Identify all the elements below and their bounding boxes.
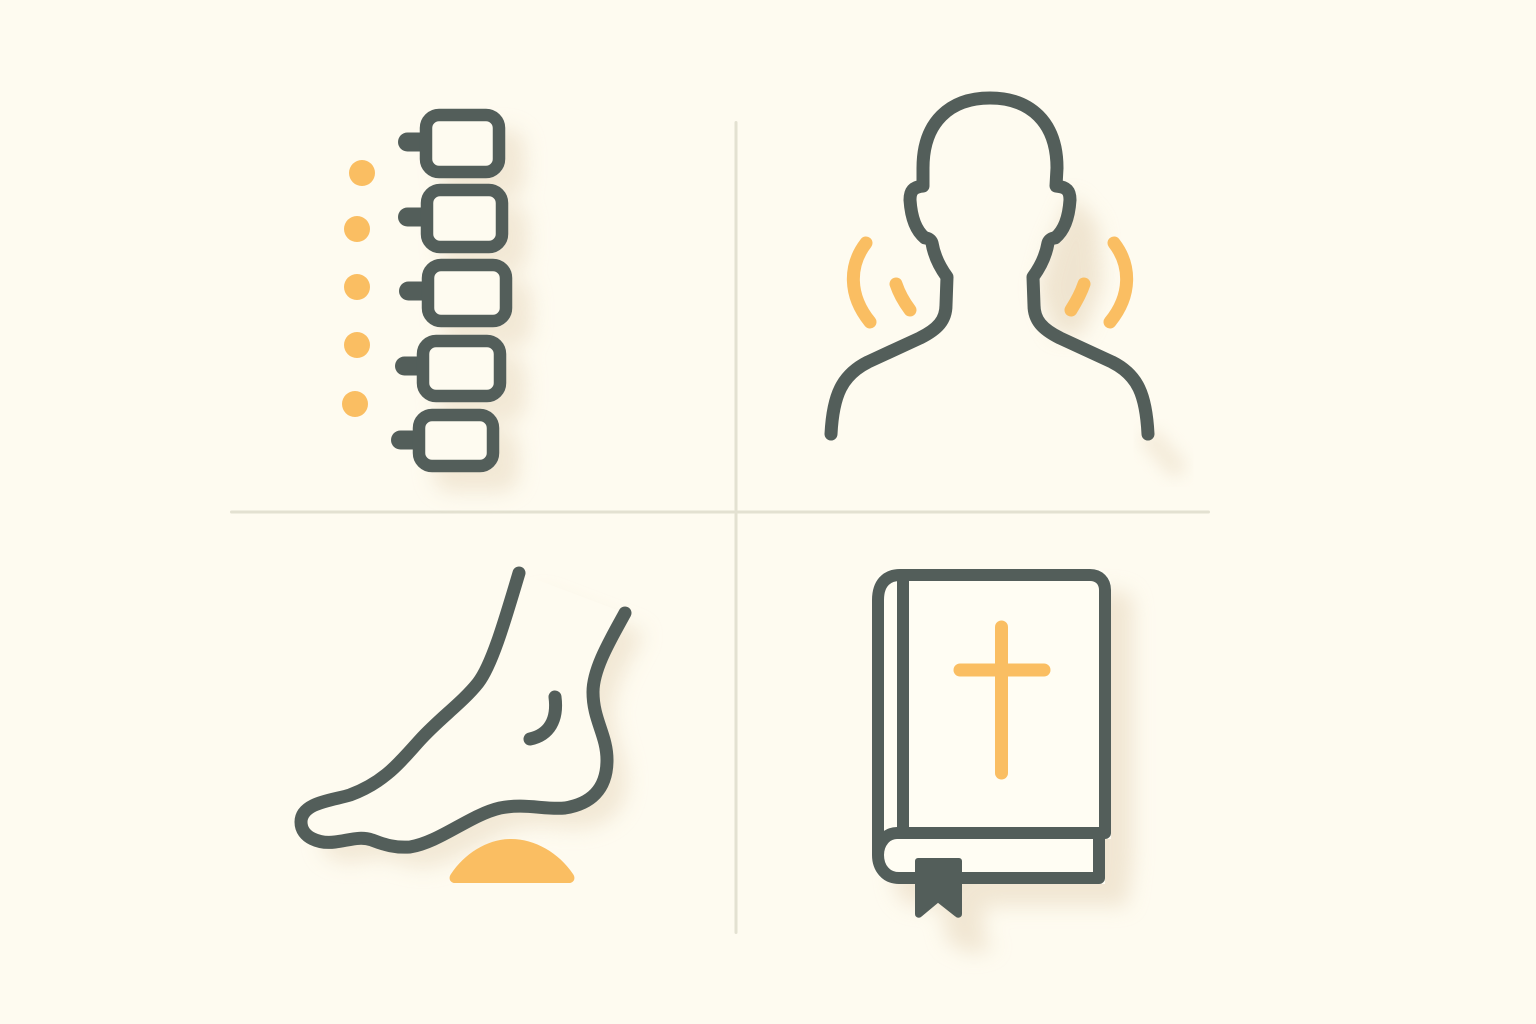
vertical divider <box>734 121 738 934</box>
icon: foot with arch support <box>301 573 645 883</box>
cross <box>960 627 1044 773</box>
horizontal divider <box>230 510 1210 514</box>
icon: person with neck pain <box>831 98 1175 466</box>
book cover <box>878 575 1105 878</box>
spine vertebra tabs <box>391 132 428 450</box>
spine vertebrae <box>419 115 506 466</box>
bookmark <box>918 861 959 915</box>
foot fill <box>301 573 625 847</box>
person outline <box>831 98 1148 434</box>
icon: bible <box>872 569 1133 954</box>
vertebra fills <box>413 109 512 472</box>
foot outline <box>301 573 625 847</box>
arch support <box>450 839 574 883</box>
pain arcs <box>853 243 1127 322</box>
icon: spine <box>342 109 532 492</box>
book page fill <box>872 569 1111 884</box>
spine dots <box>342 160 375 417</box>
book spine <box>897 577 909 831</box>
ankle mark <box>530 697 556 739</box>
